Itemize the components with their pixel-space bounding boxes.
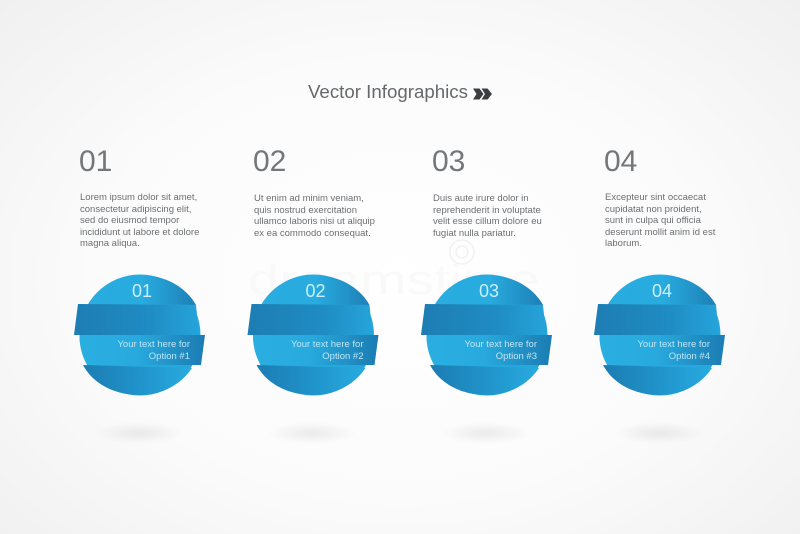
title: Vector Infographics	[308, 81, 468, 102]
top cap	[619, 275, 716, 305]
upper band	[74, 304, 199, 335]
bottom cap	[83, 365, 192, 395]
heading: number 04: 04	[604, 145, 637, 178]
text block: column 2: ullamco laboris nisi ut aliquip	[254, 216, 375, 227]
heading: number 03: 03	[432, 145, 465, 178]
top cap	[446, 275, 543, 305]
caption: Your text here for	[117, 339, 190, 350]
watermark	[248, 240, 540, 303]
upper band	[248, 304, 372, 335]
text block: column 4	[605, 192, 716, 249]
heading: number 02: 02	[253, 145, 286, 178]
caption: Your text here for	[637, 339, 710, 350]
lower band	[426, 335, 552, 365]
lower band	[79, 335, 205, 365]
disc	[600, 274, 720, 396]
label: 04	[652, 281, 672, 301]
upper band	[421, 304, 546, 335]
text block: column 4: cupidatat non proident,	[605, 204, 702, 215]
text block: column 2: Ut enim ad minim veniam,	[254, 193, 364, 204]
text block: column 2: ex ea commodo consequat.	[254, 228, 371, 239]
text block: column 1	[80, 192, 199, 249]
top cap	[99, 275, 196, 305]
text block: column 4: laborum.	[605, 238, 642, 249]
caption: Option #3	[496, 351, 537, 362]
bottom cap	[256, 365, 366, 395]
shadow	[441, 422, 531, 444]
text block: column 2	[254, 193, 375, 239]
circle 2	[248, 274, 378, 444]
watermark: dreamstime	[248, 256, 540, 303]
text block: column 3	[433, 193, 542, 239]
text block: column 3: velit esse cillum dolore eu	[433, 216, 542, 227]
label: 02	[305, 281, 326, 301]
lower band	[253, 335, 378, 365]
text block: column 4: deserunt mollit anim id est	[605, 227, 715, 238]
shadow	[614, 422, 704, 444]
caption: Your text here for	[464, 339, 537, 350]
shadow	[94, 422, 184, 444]
upper band	[594, 304, 719, 335]
icon: double chevron arrow	[473, 88, 492, 100]
bottom cap	[603, 365, 712, 395]
heading: number 01: 01	[79, 145, 112, 178]
text block: column 1: consectetur adipiscing elit,	[80, 204, 191, 215]
text block: column 4: sunt in culpa qui officia	[605, 215, 701, 226]
caption: Option #2	[322, 351, 364, 362]
label: 03	[479, 281, 499, 301]
lower band	[599, 335, 725, 365]
shadow	[268, 422, 358, 444]
caption: Option #1	[149, 351, 190, 362]
circle 4	[594, 274, 725, 444]
caption: Option #4	[669, 351, 710, 362]
bottom cap	[430, 365, 539, 395]
text block: column 1: sed do eiusmod tempor	[80, 215, 179, 226]
circle 1	[74, 274, 205, 444]
text block: column 1: incididunt ut labore et dolore	[80, 227, 199, 238]
circle 3	[421, 274, 552, 444]
disc	[426, 274, 548, 396]
text block: column 3: fugiat nulla pariatur.	[433, 228, 516, 239]
text block: column 3: reprehenderit in voluptate	[433, 205, 541, 216]
disc	[80, 274, 200, 396]
disc	[253, 274, 374, 396]
top cap	[272, 275, 370, 305]
text block: column 3: Duis aute irure dolor in	[433, 193, 529, 204]
label: 01	[132, 281, 152, 301]
text block: column 4: Excepteur sint occaecat	[605, 192, 706, 203]
text block: column 2: quis nostrud exercitation	[254, 205, 357, 216]
text block: column 1: magna aliqua.	[80, 238, 140, 249]
caption: Your text here for	[291, 339, 364, 350]
text block: column 1: Lorem ipsum dolor sit amet,	[80, 192, 197, 203]
